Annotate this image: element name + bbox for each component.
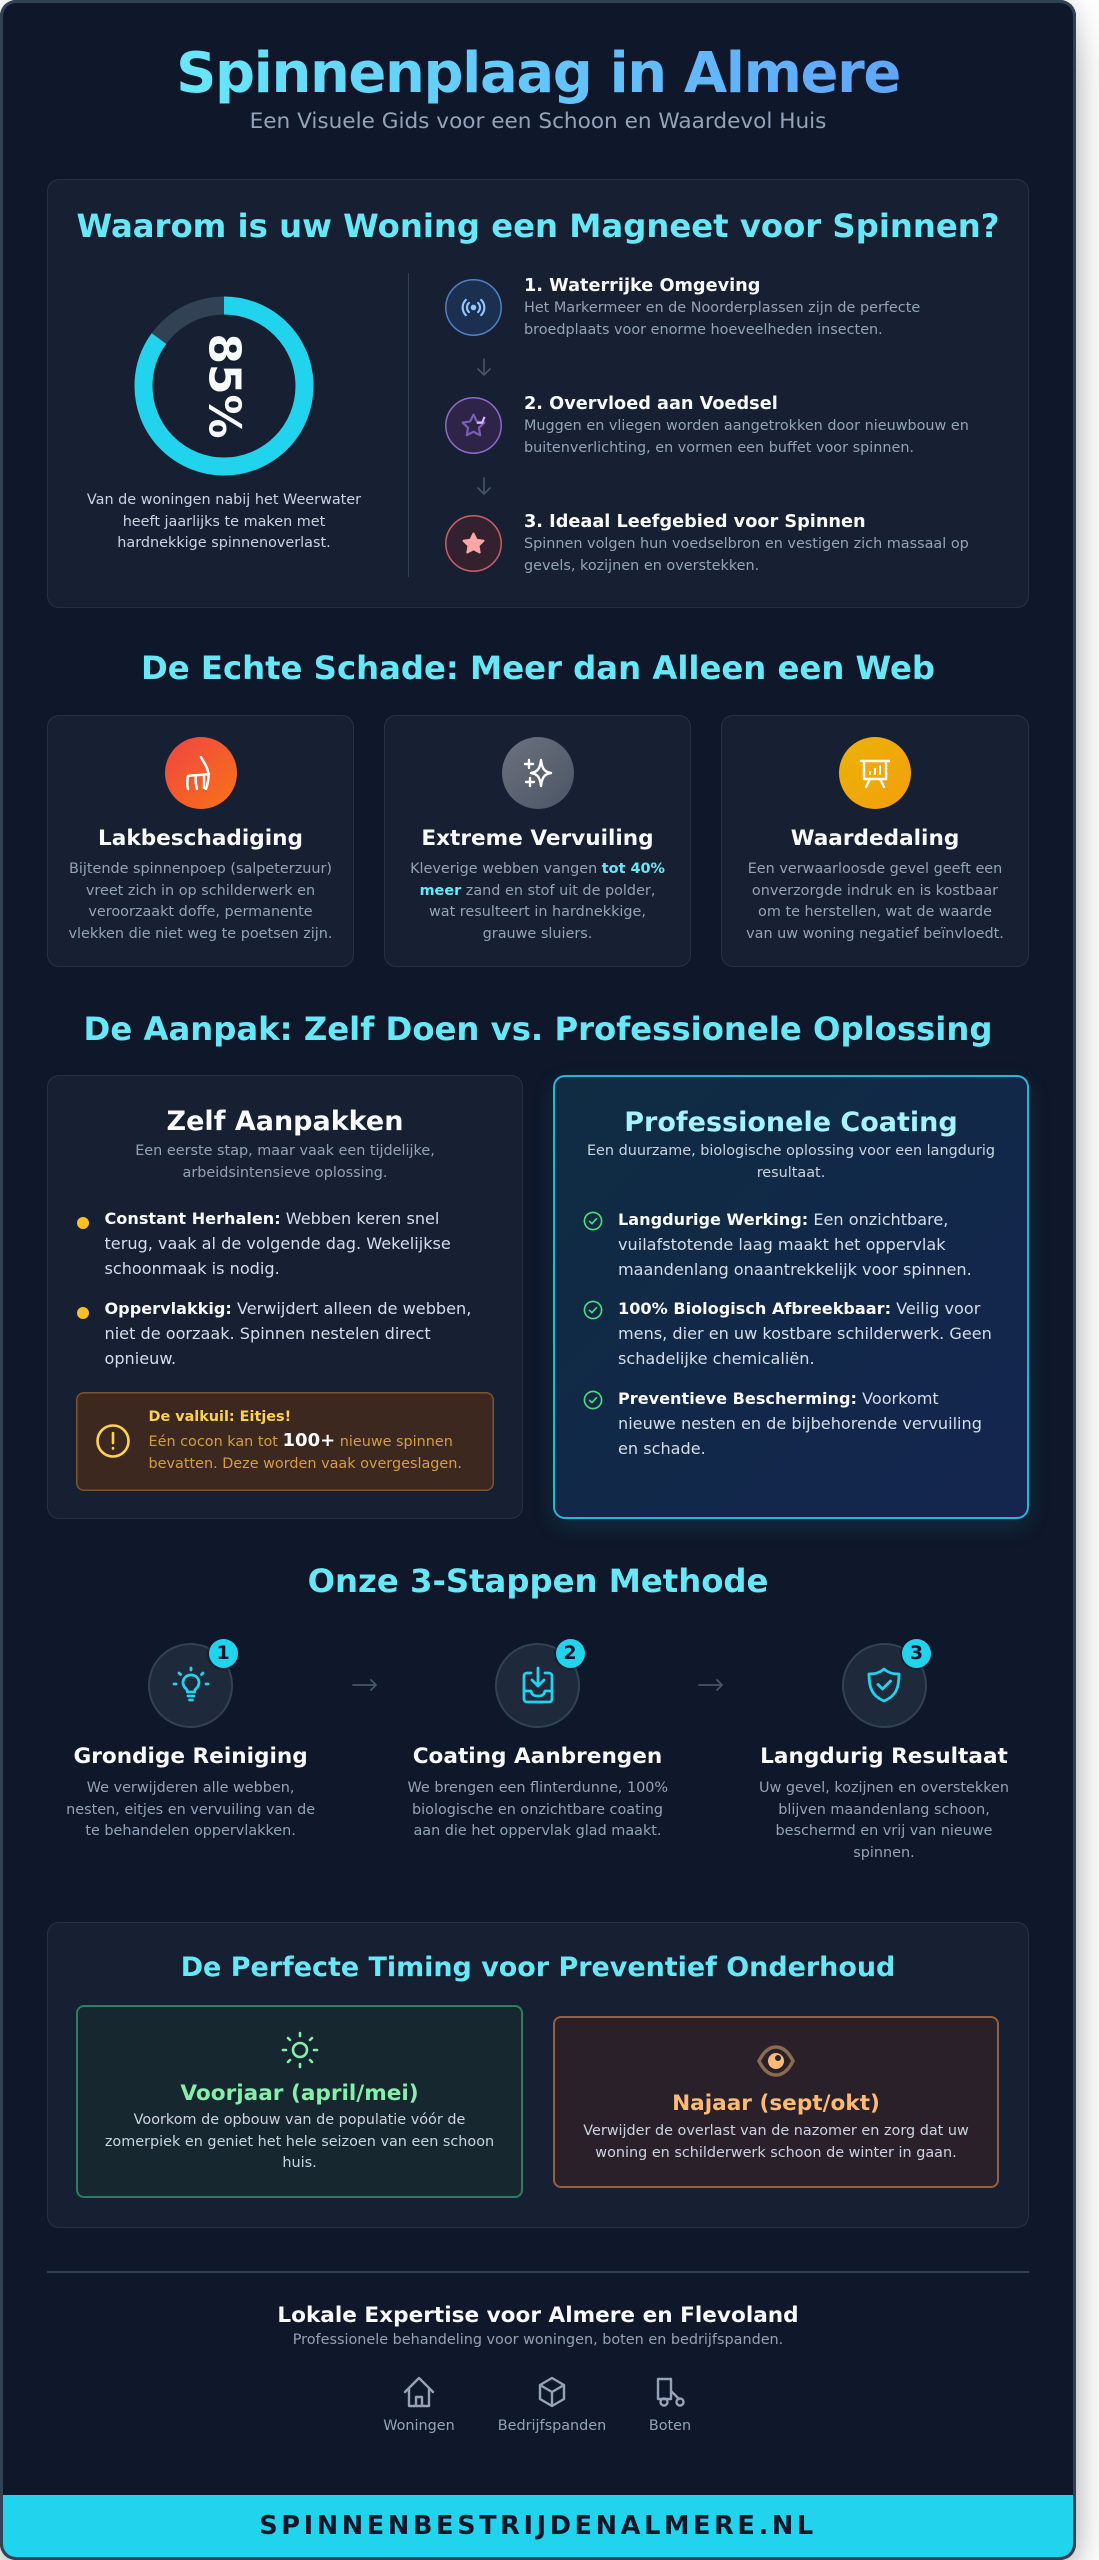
panel intro: resultaat. [757,1165,825,1181]
reason 1 text: broedplaats voor enorme hoeveelheden insecten. [524,322,883,338]
panel title: Zelf Aanpakken [167,1106,403,1137]
bullet: superficial [77,1298,471,1368]
benefit text: mens, dier en uw kostbare schilderwerk. Geen [618,1324,992,1343]
bullet text [104,1298,471,1368]
benefit text [618,1299,992,1368]
callout text: Eén cocon kan tot 100+ nieuwe spinnen [148,1430,453,1451]
arrow right 1 [352,1679,377,1691]
reason 2 text: Muggen en vliegen worden aangetrokken door nieuwbouw en [524,418,969,434]
callout text: bevatten. Deze worden vaak overgeslagen. [148,1456,462,1472]
benefit text: Preventieve Bescherming: Voorkomt [618,1388,939,1408]
step text: nesten, eitjes en vervuiling van de [66,1802,315,1818]
icon: cube [536,2376,568,2408]
step text [754,1778,1014,1864]
card text [746,861,1004,942]
badge 3: 3 [910,1642,923,1664]
badge 3 [902,1638,931,1668]
item: homes [359,2376,479,2438]
label: Boten [649,2418,691,2434]
step title: Grondige Reiniging [73,1744,308,1769]
bullet: constant repeating [77,1208,451,1278]
season text: Verwijder de overlast van de nazomer en zorg dat uw [583,2123,969,2139]
step text: spinnen. [853,1845,915,1861]
panel intro: Een eerste stap, maar vaak een tijdelijke, [135,1143,435,1159]
bullet text: terug, vaak al de volgende dag. Wekelijkse [104,1234,451,1252]
card text: wat resulteert in hardnekkige, [429,904,646,920]
step title: Coating Aanbrengen [413,1744,662,1769]
benefit text [618,1210,972,1278]
season text: woning en schilderwerk schoon de winter in gaan. [595,2145,957,2161]
season title: Voorjaar (april/mei) [180,2081,419,2106]
step text: Uw gevel, kozijnen en overstekken [759,1780,1009,1796]
bullet dot [77,1217,89,1229]
item: boats [610,2376,730,2438]
item: businesses [492,2376,612,2438]
card text: om te herstellen, wat de waarde [758,904,992,920]
bullet text: Oppervlakkig: Verwijdert alleen de webben, [104,1298,471,1318]
bullet text: Constant Herhalen: Webben keren snel [104,1208,439,1228]
panel title: Professionele Coating [624,1107,958,1138]
card text: vreet zich in op schilderwerk en [86,883,315,899]
donut caption: heeft jaarlijks te maken met [123,514,325,530]
benefit text: nieuwe nesten en de bijbehorende vervuiling [618,1414,982,1432]
step 2 [408,1639,668,1839]
card text [69,861,332,942]
badge 2: 2 [563,1642,577,1664]
benefit text: 100% Biologisch Afbreekbaar: Veilig voor [618,1299,980,1318]
label: Woningen [383,2418,455,2434]
benefit text: Langdurige Werking: Een onzichtbare, [618,1210,948,1228]
footer heading: Lokale Expertise voor Almere en Flevoland [277,2303,799,2328]
callout text [148,1430,462,1472]
card text [410,861,665,942]
icon: star with tick [445,397,502,454]
icon: warning [96,1424,130,1458]
benefit text [618,1388,982,1458]
card: value decline [721,715,1029,967]
step title: Langdurig Resultaat [760,1744,1008,1769]
card text: van uw woning negatief beïnvloedt. [746,926,1004,942]
step text: We brengen een flinterdunne, 100% [408,1780,668,1796]
bullet text: niet de oorzaak. Spinnen nestelen direct [104,1324,431,1342]
step text [408,1780,668,1839]
benefit: long lasting [584,1210,972,1278]
step text: We verwijderen alle webben, [87,1780,294,1796]
benefit text: schadelijke chemicaliën. [618,1349,815,1368]
warning callout: eggs [76,1392,494,1491]
bullet text [104,1208,451,1278]
panel intro: arbeidsintensieve oplossing. [183,1165,387,1181]
card text: Een verwaarloosde gevel geeft een [748,861,1002,877]
panel: why your home attracts spiders [47,179,1029,608]
season text: zomerpiek en geniet het hele seizoen van een schoon [105,2134,494,2150]
footer: local expertise [47,2290,1029,2440]
season text [553,2121,999,2164]
donut chart: 85% [134,296,314,476]
step text [66,1780,315,1839]
card title: Extreme Vervuiling [421,826,654,851]
benefit text: maandenlang onaantrekkelijk voor spinnen. [618,1260,972,1278]
benefit: biodegradable [584,1299,992,1368]
reason 2 text: buitenverlichting, en vormen een buffet voor spinnen. [524,440,914,456]
season card: autumn [553,2016,999,2188]
bullet text: schoonmaak is nodig. [104,1258,280,1278]
reason 3 text: Spinnen volgen hun voedselbron en vestigen zich massaal op [524,536,969,552]
icon: broadcast [445,279,502,336]
bullet dot [77,1307,89,1319]
badge 1 [209,1638,238,1668]
footer band: website [3,2495,1073,2557]
season text: huis. [282,2155,317,2171]
heading: timing: De Perfecte Timing voor Preventief Onderhoud [181,1952,895,1983]
heading: real damage: De Echte Schade: Meer dan Alleen een Web [141,649,935,687]
card text: Kleverige webben vangen tot 40% [410,861,665,877]
label: Bedrijfspanden [498,2418,606,2434]
icon: eye [758,2046,794,2076]
season text [76,2110,523,2175]
icon: vehicle [654,2376,686,2408]
donut caption [87,492,362,551]
reason 3 text: gevels, kozijnen en overstekken. [524,558,759,574]
icon circle: shield [842,1642,926,1728]
panel: professional coating [553,1075,1029,1519]
panel: timing [47,1922,1029,2228]
donut chart: 85%: 85% [198,333,250,439]
heading: 3 step method: Onze 3-Stappen Methode [308,1562,768,1600]
title: Spinnenplaag in Almere [176,41,900,106]
arrow down 2 [477,477,491,495]
card text: grauwe sluiers. [483,926,592,942]
bullet text: opnieuw. [104,1348,176,1368]
icon: check [584,1212,602,1230]
reason 2 title: 2. Overvloed aan Voedsel [524,394,778,414]
card text: meer zand en stof uit de polder, [420,883,655,899]
season title: Najaar (sept/okt) [672,2091,880,2116]
step text: te behandelen oppervlakken. [85,1823,296,1839]
step text: beschermd en vrij van nieuwe [775,1823,993,1839]
donut caption: Van de woningen nabij het Weerwater [87,492,361,508]
benefit text: en schade. [618,1438,706,1458]
card text: vlekken die niet weg te poetsen zijn. [69,926,332,942]
website url: SPINNENBESTRIJDENALMERE.NL [259,2511,817,2541]
badge 2 [556,1638,584,1668]
icon: filled star [445,515,502,572]
icon: house [403,2376,435,2408]
reason 1 text: Het Markermeer en de Noorderplassen zijn de perfecte [524,300,920,316]
season text: Voorkom de opbouw van de populatie vóór de [134,2112,465,2128]
card text: veroorzaakt doffe, permanente [88,904,313,920]
card title: Waardedaling [791,826,959,851]
heading: approach: De Aanpak: Zelf Doen vs. Professionele Oplossing [84,1010,992,1048]
reason 1 title: 1. Waterrijke Omgeving [524,276,760,296]
reason 3 title: 3. Ideaal Leefgebied voor Spinnen [524,512,866,532]
panel intro [587,1143,995,1181]
reason 3 text [524,536,969,574]
step 1 [66,1639,315,1839]
icon: check [584,1390,602,1410]
icon circle: bulb [148,1642,233,1728]
step text: aan die het oppervlak glad maakt. [413,1823,662,1839]
subtitle: Een Visuele Gids voor een Schoon en Waardevol Huis [250,109,826,134]
panel intro: Een duurzame, biologische oplossing voor een langdurig [587,1143,995,1159]
icon: check [584,1300,602,1320]
donut caption: hardnekkige spinnenoverlast. [117,535,331,551]
callout title: De valkuil: Eitjes! [148,1409,291,1425]
card title: Lakbeschadiging [98,826,303,851]
reason 1 text [524,300,920,338]
card text: Bijtende spinnenpoep (salpeterzuur) [69,861,332,877]
step text: blijven maandenlang schoon, [778,1802,990,1818]
card text: onverzorgde indruk en is kostbaar [752,883,998,899]
card: extreme soiling [384,715,691,967]
reason 1 [524,276,920,338]
arrow right 2 [698,1679,723,1691]
step text: biologische en onzichtbare coating [412,1802,663,1818]
reason 3 [524,512,969,574]
reason 2 text [524,418,969,456]
panel: do it yourself [47,1075,523,1519]
footer subtext: Professionele behandeling voor woningen, boten en bedrijfspanden. [293,2332,783,2348]
season card: spring [76,2005,523,2198]
panel intro [135,1143,435,1181]
icon: sparkles [502,737,574,809]
icon circle: inbox download [495,1642,580,1728]
arrow down 1 [477,358,491,376]
benefit text: vuilafstotende laag maakt het oppervlak [618,1234,946,1254]
icon: sun [282,2032,318,2068]
step 3 [754,1642,1014,1862]
benefit: preventive [584,1388,982,1458]
card: paint damage [47,715,354,967]
reason 2 [524,394,969,456]
badge 1: 1 [216,1642,230,1664]
icon: paint damage [164,737,236,809]
heading: why: Waarom is uw Woning een Magneet voor Spinnen? [76,207,1000,245]
icon: presentation chart [839,737,911,809]
